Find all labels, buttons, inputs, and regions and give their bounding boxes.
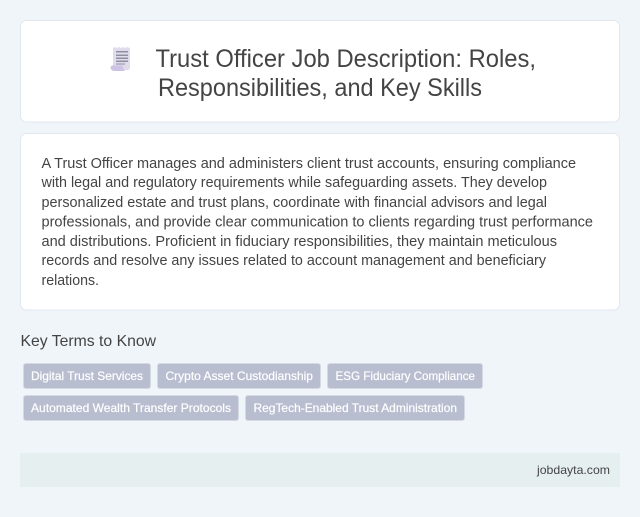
footer bar xyxy=(20,453,620,487)
text block: description paragraph: relations. xyxy=(42,273,99,289)
heading: key terms: Key Terms to Know xyxy=(20,333,156,350)
tag: Digital Trust Services xyxy=(24,364,150,388)
text block: description paragraph: professionals, and provide clear communication to clients regarding trust performance xyxy=(42,214,593,230)
title xyxy=(156,45,536,102)
panel: description xyxy=(20,134,620,310)
text block: description paragraph: A Trust Officer manages and administers client trust accounts, ensuring compliance xyxy=(42,156,576,172)
text block: description paragraph: and distributions. Proficient in fiduciary responsibilities, they maintain meticulous xyxy=(42,234,557,250)
tag: ESG Fiduciary Compliance: ESG Fiduciary Compliance xyxy=(336,369,475,383)
text block: description paragraph xyxy=(41,156,593,289)
icon: document scroll xyxy=(110,47,130,71)
text block: description paragraph: personalized estate and trust plans, coordinate with financial advisors and legal xyxy=(42,195,547,211)
text block: description paragraph: with legal and regulatory requirements while safeguarding assets. They develop xyxy=(41,175,547,191)
tag: RegTech-Enabled Trust Administration xyxy=(246,396,464,420)
tag: ESG Fiduciary Compliance xyxy=(328,364,482,388)
tag: Crypto Asset Custodianship: Crypto Asset Custodianship xyxy=(166,369,313,383)
footer source text: jobdayta.com xyxy=(536,463,610,477)
tag: Automated Wealth Transfer Protocols: Automated Wealth Transfer Protocols xyxy=(31,401,231,415)
text block: description paragraph: records and resolve any issues related to account management and beneficiary xyxy=(42,253,547,269)
title: Trust Officer Job Description: Roles, xyxy=(156,45,536,73)
tag: RegTech-Enabled Trust Administration: RegTech-Enabled Trust Administration xyxy=(254,401,457,415)
panel: title card xyxy=(20,20,620,122)
tag: Digital Trust Services: Digital Trust Services xyxy=(31,369,143,383)
title: Responsibilities, and Key Skills xyxy=(158,74,482,102)
tag: Crypto Asset Custodianship xyxy=(158,364,320,388)
tag: Automated Wealth Transfer Protocols xyxy=(24,396,238,420)
